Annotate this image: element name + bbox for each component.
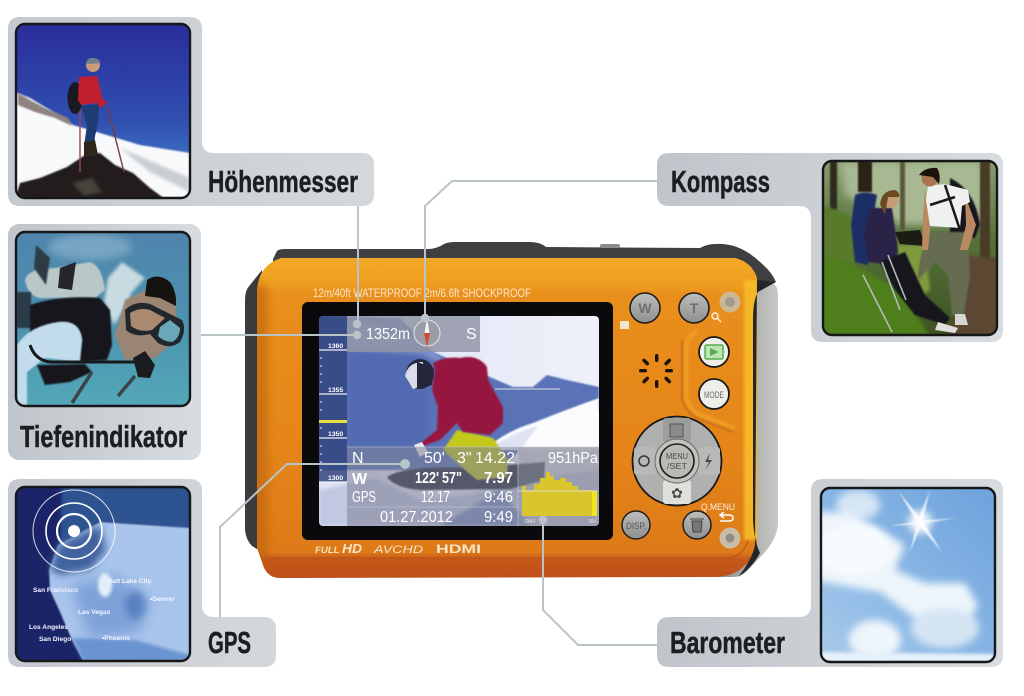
man shirt	[926, 184, 970, 228]
lower shadow	[440, 490, 530, 526]
latitude: N	[352, 450, 364, 467]
clock 2: 9:49	[484, 509, 513, 526]
vest	[30, 297, 112, 362]
trunk 1	[830, 160, 837, 210]
longitude: W	[352, 471, 368, 488]
button trash	[683, 511, 711, 539]
timer icon	[639, 456, 649, 466]
clock: 9:46	[484, 489, 513, 506]
screw bottom	[720, 528, 740, 548]
scale 1350: 1350	[328, 431, 343, 438]
city: Los Angeles: Los Angeles	[29, 624, 68, 631]
canada	[60, 486, 190, 545]
hdmi logo: HDMI	[436, 542, 481, 556]
position dot	[68, 525, 80, 537]
woman torso	[864, 208, 898, 265]
man backpack	[950, 178, 980, 238]
top key	[663, 418, 691, 442]
photo: map	[15, 486, 191, 662]
cloud main	[815, 512, 978, 632]
flash icon	[705, 453, 712, 470]
scale 1360: 1360	[328, 343, 343, 350]
label: Tiefenindikator	[20, 419, 187, 454]
ski arrow line	[495, 388, 560, 390]
latitude values: 3"	[457, 450, 472, 467]
panel: Höhenmesser	[8, 17, 374, 206]
gps panel	[347, 447, 518, 526]
terrain dark	[70, 575, 150, 640]
icon: grid	[620, 321, 629, 329]
top button	[600, 244, 620, 248]
summit rock	[15, 153, 165, 199]
legs	[81, 104, 99, 146]
black side seam	[738, 280, 776, 577]
coast dark	[50, 525, 106, 575]
valve	[34, 245, 50, 285]
scale background	[319, 316, 347, 482]
camera	[245, 242, 778, 578]
hose	[30, 345, 140, 362]
woman hair	[880, 190, 899, 215]
waterproof text: 12m/40ft WATERPROOF 2m/6.6ft SHOCKPROOF	[313, 288, 531, 300]
snow slope	[15, 92, 190, 199]
panel background	[657, 153, 1003, 342]
icon: magnifier	[712, 313, 721, 322]
south readout: S	[466, 326, 477, 343]
mask	[125, 303, 184, 346]
trunk 3	[980, 160, 990, 265]
avchd logo: AVCHD	[373, 544, 423, 556]
altitude bar	[347, 316, 480, 352]
scale 1300: 1300	[328, 475, 343, 482]
q menu label: Q.MENU	[701, 502, 735, 513]
sun star	[890, 490, 956, 552]
blue mountain	[319, 316, 599, 470]
photo frame	[823, 161, 997, 335]
left lens	[130, 309, 165, 331]
skis	[387, 462, 545, 490]
tank band	[58, 262, 76, 290]
trunk 2	[858, 160, 872, 192]
boots	[84, 140, 98, 157]
menu label: MENU	[666, 451, 688, 461]
control ridge	[686, 332, 735, 428]
right highlight	[744, 280, 760, 540]
arm	[17, 322, 82, 405]
photo: hikers	[822, 160, 998, 336]
woman legs	[880, 252, 950, 325]
sun glow	[908, 510, 932, 534]
left straps	[17, 292, 31, 328]
man straps	[930, 185, 960, 230]
map in hands	[895, 230, 925, 246]
moss	[822, 250, 930, 336]
city: Phoenix: •Phoenix	[102, 635, 130, 642]
photo frame	[16, 232, 190, 406]
moss clearing	[895, 245, 930, 300]
longitude value decimals: 7.97	[484, 470, 513, 487]
photo: mountaineer	[15, 23, 191, 199]
button mode	[699, 379, 729, 409]
city: San Diego: San Diego	[39, 636, 71, 643]
man hair	[919, 168, 940, 184]
right silver grip	[715, 283, 778, 577]
sky	[319, 316, 599, 526]
left rubber grip	[245, 270, 262, 552]
lower gear	[37, 364, 92, 385]
photo frame	[16, 24, 190, 198]
altitude readout: 1352m	[366, 326, 410, 343]
terrain mottling	[125, 591, 145, 619]
photo frame	[821, 488, 995, 662]
city: San Francisco: San Francisco	[33, 587, 78, 594]
pressure: 951hPa	[548, 450, 598, 467]
helmet	[406, 359, 434, 389]
longitude value seconds: 57"	[442, 470, 462, 487]
photo: sky	[815, 487, 996, 663]
cloud base	[820, 652, 996, 663]
d-pad	[632, 416, 722, 506]
full hd logo: FULL HD	[315, 541, 363, 556]
logos	[315, 541, 481, 556]
depth scale	[319, 316, 347, 482]
regulator	[133, 351, 155, 378]
upper slope	[364, 352, 442, 361]
path	[950, 255, 998, 336]
label: GPS	[208, 625, 251, 660]
cloud low	[849, 620, 901, 660]
bubbles	[48, 234, 132, 260]
date: 01.27.2012	[380, 509, 453, 526]
red jacket	[420, 357, 503, 447]
cap	[86, 58, 100, 64]
helmet stripe	[405, 362, 424, 389]
pressure histogram	[522, 472, 592, 516]
panel: Barometer	[657, 479, 1003, 667]
bubble column	[104, 262, 145, 325]
scale 1355: 1355	[328, 387, 343, 394]
panel background	[8, 17, 374, 206]
current bar	[592, 491, 597, 516]
connector: Kompass	[421, 181, 657, 322]
button W	[630, 293, 660, 323]
panel background	[8, 224, 201, 460]
man head	[922, 170, 938, 186]
panel bottom crease	[270, 540, 748, 558]
man shoe	[955, 314, 968, 325]
city: Denver: •Denver	[150, 596, 175, 603]
button W: W	[638, 300, 652, 316]
compass	[414, 318, 440, 347]
latitude values: 14.22	[475, 450, 515, 467]
cloud upper	[836, 490, 880, 520]
snow shadows	[120, 148, 190, 192]
panel background	[657, 479, 1003, 667]
man arms	[922, 190, 976, 250]
backpack	[68, 82, 82, 114]
hiking pole left	[79, 105, 81, 172]
top rubber bumper	[273, 242, 776, 290]
button disp: DISP.	[626, 521, 646, 531]
red shirt	[78, 76, 108, 108]
helmet dark	[417, 362, 434, 389]
latitude values: 50'	[424, 450, 445, 467]
right key	[698, 447, 720, 475]
button mode: MODE	[704, 390, 724, 400]
flower icon: ✿	[671, 485, 683, 501]
connector: GPS	[220, 459, 410, 617]
body shading	[250, 280, 760, 565]
backpack woman	[851, 192, 877, 265]
left blue shade	[353, 352, 430, 440]
button T: T	[690, 300, 699, 316]
time: 12.17	[421, 489, 450, 506]
ridge shadow	[682, 340, 733, 432]
screen image	[319, 316, 599, 526]
right lens	[158, 320, 180, 342]
mexico	[72, 638, 190, 662]
man trousers	[918, 232, 970, 316]
face	[115, 288, 176, 360]
hiking poles	[863, 255, 906, 332]
panel: Tiefenindikator	[8, 224, 201, 460]
photo frame	[16, 487, 190, 661]
screw top	[720, 292, 740, 312]
glove	[414, 442, 428, 457]
rock highlights	[72, 178, 102, 196]
return arrow	[720, 512, 733, 521]
pressure panel	[518, 447, 599, 526]
longitude value minutes: 122'	[415, 470, 439, 487]
panel: GPS	[8, 479, 276, 667]
tank	[25, 262, 105, 298]
connector: Tiefenindikator	[201, 331, 361, 339]
rings	[33, 490, 115, 572]
yellow marker	[319, 420, 347, 423]
scale ticks	[320, 358, 322, 470]
terrain lights	[98, 573, 112, 597]
screen bezel	[302, 302, 613, 540]
speaker	[639, 354, 673, 388]
label: Barometer	[670, 625, 785, 660]
city: Las Vegas: Las Vegas	[78, 609, 111, 616]
gps tag: GPS	[352, 489, 376, 506]
rocky ridge	[18, 93, 72, 126]
panel: Kompass	[657, 153, 1003, 342]
axis end: 0H	[589, 519, 596, 525]
woman shoes	[935, 322, 958, 333]
cloud bulge	[819, 525, 891, 575]
menu ring	[655, 439, 699, 483]
set label: /SET	[667, 461, 687, 471]
button disp	[622, 511, 650, 539]
moss left	[822, 205, 855, 265]
cloud right	[911, 608, 979, 648]
orange body	[257, 258, 757, 578]
connector: Höhenmesser	[353, 206, 361, 328]
photo: diver	[15, 231, 191, 407]
head	[86, 58, 100, 72]
connector: Barometer	[539, 516, 657, 645]
hair	[145, 276, 176, 306]
menu set button	[660, 444, 694, 478]
yellow pants	[443, 430, 508, 480]
lower hose	[72, 372, 135, 403]
canopy light	[840, 162, 985, 225]
button play	[699, 337, 729, 367]
panel background	[8, 479, 276, 667]
exposure icon	[670, 424, 683, 437]
snow hump	[497, 426, 538, 449]
land	[49, 522, 190, 662]
left shade	[257, 282, 270, 567]
trunk 4	[900, 160, 905, 230]
button T	[679, 293, 709, 323]
bottom key	[663, 480, 691, 504]
axis labels: -24H	[523, 519, 535, 525]
lower snow	[319, 470, 599, 526]
label: Kompass	[671, 164, 770, 199]
city: Salt Lake City: Salt Lake City	[108, 578, 152, 585]
woman head	[882, 192, 898, 208]
label: Höhenmesser	[208, 164, 358, 199]
left key	[634, 447, 656, 475]
snow bank	[490, 398, 599, 450]
hiking pole right	[107, 105, 124, 172]
